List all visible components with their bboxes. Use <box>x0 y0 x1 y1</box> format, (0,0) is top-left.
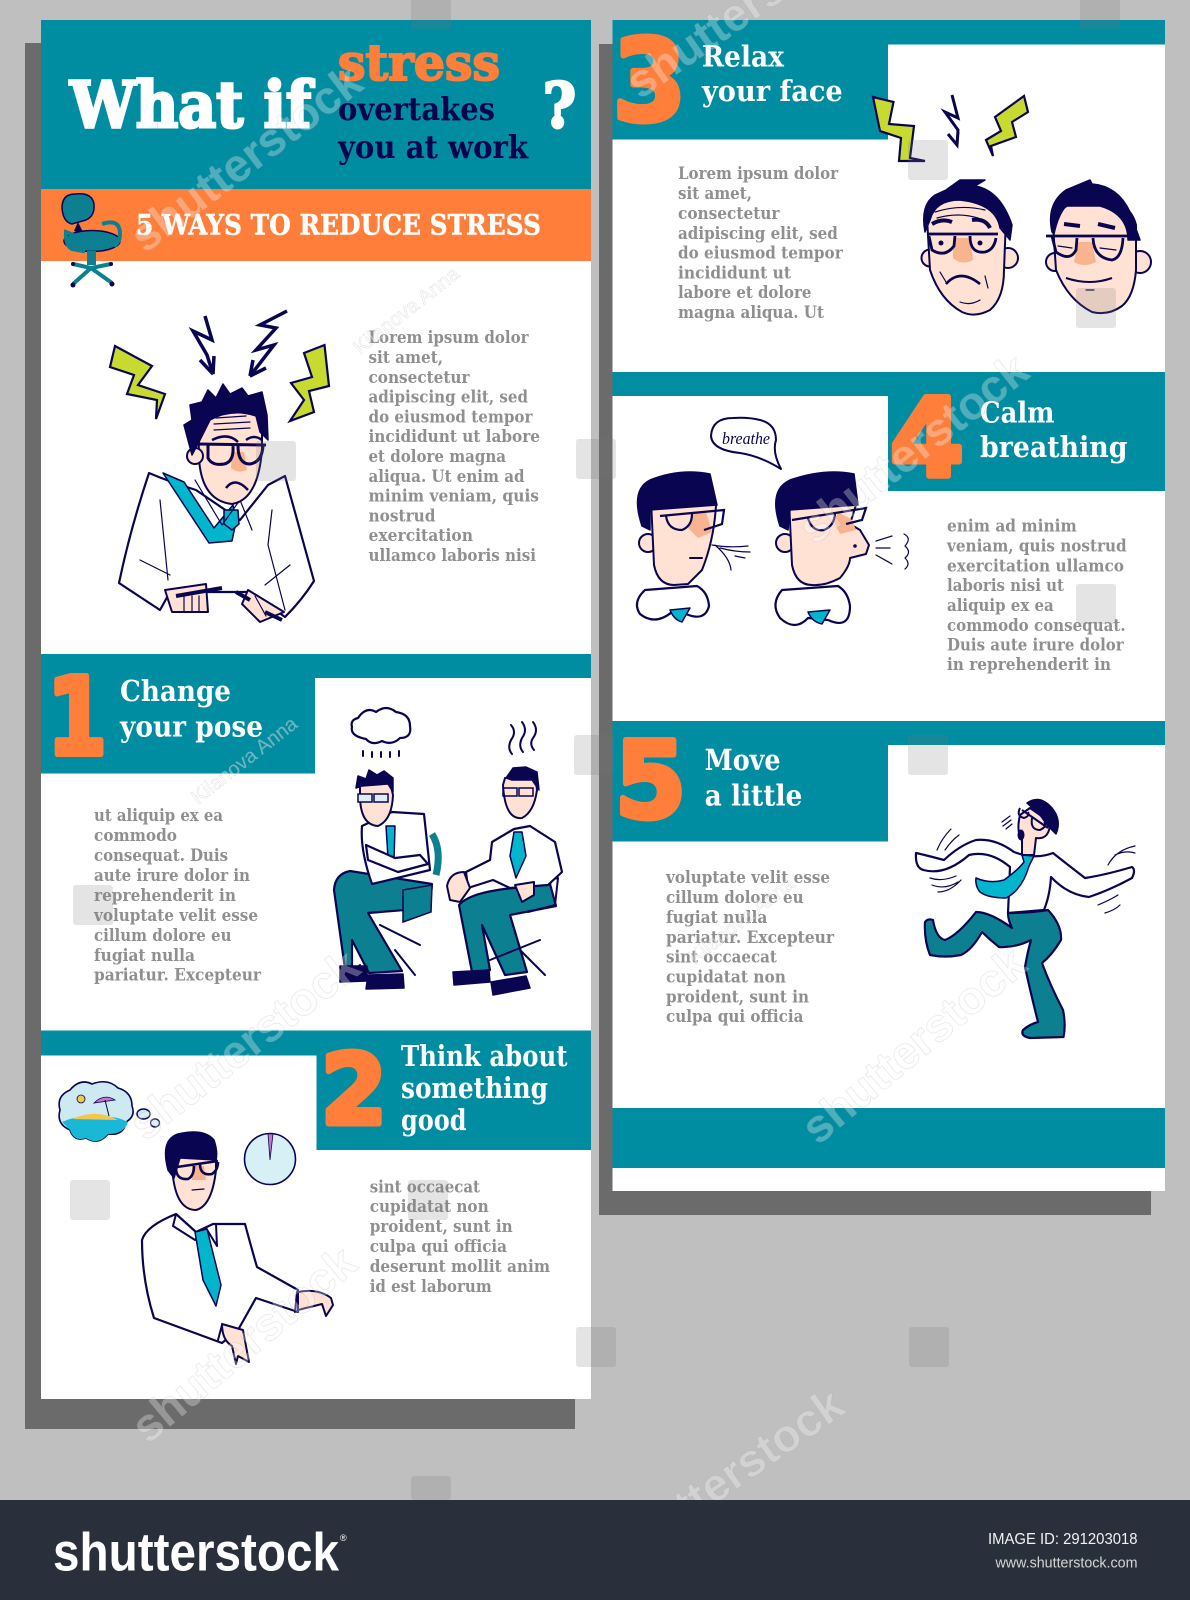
title: you at work: you at work <box>337 128 529 166</box>
text block: section 1: cillum dolore eu <box>94 926 232 946</box>
watermarks: shutterstock <box>597 1377 853 1578</box>
text block: section 4: commodo consequat. <box>947 616 1126 636</box>
text block: section 4 <box>946 517 1127 675</box>
title: question mark: ? <box>543 69 576 142</box>
text block: section 1: consequat. Duis <box>94 846 228 866</box>
text block: section 1: reprehenderit in <box>94 886 236 906</box>
text block: section 3: magna aliqua. Ut <box>678 303 824 323</box>
text block: section 4: laboris nisi ut <box>947 576 1064 596</box>
text block: intro: exercitation <box>368 526 473 546</box>
text block: section 1: pariatur. Excepteur <box>94 966 262 986</box>
website: www.shutterstock.com <box>995 1555 1138 1572</box>
text block: section 5: sint occaecat <box>666 948 777 968</box>
text block: section 1 <box>93 806 262 986</box>
text block: section 3: Lorem ipsum dolor <box>678 164 839 184</box>
section 1 header: your pose <box>119 710 263 744</box>
icon: thought cloud with beach <box>59 1082 159 1141</box>
illustration: dancing wobbly man <box>916 799 1135 1038</box>
text block: section 3: adipiscing elit, sed <box>678 224 838 244</box>
watermarks: Kilanova Anna <box>350 262 465 359</box>
text block: intro: do eiusmod tempor <box>368 408 533 428</box>
section 5 header <box>612 720 1165 842</box>
section 4 header <box>612 372 1165 502</box>
watermarks: shutterstock <box>120 54 372 262</box>
section 1 header <box>41 654 591 780</box>
section 2 header: Think about <box>401 1039 568 1073</box>
section 2 header: something <box>401 1071 548 1105</box>
illustration: breathing men <box>637 418 908 625</box>
icon: clock <box>244 1134 296 1184</box>
text block: section 4: exercitation ullamco <box>947 556 1124 576</box>
section 5 header: Move <box>705 743 781 777</box>
panel shadow: right page <box>599 44 1151 1215</box>
text block: intro <box>368 328 540 566</box>
section 2 header: good <box>401 1103 466 1137</box>
torso and arms <box>916 840 1134 913</box>
title: What if: What if <box>69 68 314 143</box>
text block: intro: et dolore magna <box>368 447 506 467</box>
text block: section 1: ut aliquip ex ea <box>94 806 223 826</box>
stressed face <box>922 180 1018 315</box>
icon: yellow lightning right <box>986 96 1028 156</box>
text block: section 3: do eiusmod tempor <box>678 244 844 264</box>
title: overtakes: overtakes <box>338 90 495 128</box>
image id: IMAGE ID: 291203018 <box>988 1531 1138 1548</box>
watermarks <box>119 0 1038 1578</box>
man inhaling <box>637 472 750 622</box>
hands <box>298 1291 333 1316</box>
text block: section 2: deserunt mollit anim <box>370 1257 550 1277</box>
section 3 header: your face <box>701 74 843 108</box>
text block: section 3: incididunt ut <box>678 264 791 284</box>
watermarks: Kilanova Anna <box>685 872 800 969</box>
number 4: 4 <box>890 377 964 502</box>
text block: section 2: id est laborum <box>370 1277 492 1297</box>
text block: intro: incididunt ut labore <box>368 427 540 447</box>
text block: section 3 <box>678 164 844 323</box>
subtitle band <box>41 189 591 261</box>
watermarks: Kilanova Anna <box>188 712 303 809</box>
section 2 header <box>41 1030 591 1150</box>
illustration: two men on chairs <box>334 708 562 995</box>
slumped man <box>334 770 438 989</box>
watermarks: shutterstock <box>791 936 1036 1154</box>
man torso <box>142 1214 298 1343</box>
footer band of right page <box>612 1108 1165 1168</box>
tie <box>195 1229 221 1306</box>
pants <box>925 910 1065 1038</box>
text block: section 2: proident, sunt in <box>370 1217 513 1237</box>
text block: section 3: sit amet, <box>678 184 752 204</box>
man body <box>119 473 314 617</box>
motion lines <box>930 816 1135 913</box>
text block: section 3: consectetur <box>678 204 780 224</box>
text block: section 5 <box>665 868 835 1027</box>
blue tie over shoulder <box>163 473 236 543</box>
footer bar <box>0 1500 1190 1600</box>
tie <box>976 855 1034 898</box>
head <box>172 1150 216 1210</box>
section 5 header: a little <box>705 779 802 813</box>
subtitle band: 5 WAYS TO REDUCE STRESS <box>136 208 541 242</box>
text block: section 1: commodo <box>94 826 177 846</box>
text block: section 5: culpa qui officia <box>666 1007 804 1027</box>
callout: speech bubble breathe <box>711 418 781 469</box>
man exhaling <box>775 472 908 625</box>
text block: intro: Lorem ipsum dolor <box>368 328 529 348</box>
title: stress: stress <box>338 33 500 92</box>
relaxed man <box>447 767 562 995</box>
text block: intro: ullamco laboris nisi <box>368 546 536 566</box>
number 2: 2 <box>321 1034 387 1146</box>
text block: section 5: proident, sunt in <box>666 988 809 1008</box>
text block: section 5: pariatur. Excepteur <box>666 928 835 948</box>
section 4 header: Calm <box>980 395 1055 429</box>
man head <box>199 405 262 504</box>
text block: section 4: Duis aute irure dolor <box>947 636 1125 656</box>
text block: section 2: cupidatat non <box>370 1197 489 1217</box>
panel shadow: left page <box>25 43 575 1429</box>
watermarks: shutterstock <box>121 1235 366 1453</box>
text block: intro: nostrud <box>368 506 436 526</box>
title banner <box>41 20 591 189</box>
text block: intro: aliqua. Ut enim ad <box>368 467 525 487</box>
text block: section 3: labore et dolore <box>678 283 812 303</box>
section 3 header <box>612 17 1165 147</box>
relaxed face <box>1046 180 1151 313</box>
text block: section 5: fugiat nulla <box>666 908 767 928</box>
icon: navy arrow bolts <box>193 311 287 376</box>
panel: left page <box>41 20 591 1399</box>
text block: section 2: culpa qui officia <box>370 1237 507 1257</box>
text block: section 4: in reprehenderit in <box>947 655 1111 675</box>
illustration: man thinking of beach <box>59 1082 333 1364</box>
icon: navy arrow bolt <box>945 95 958 145</box>
text block: section 5: cupidatat non <box>666 968 786 988</box>
text block: section 5: cillum dolore eu <box>666 888 804 908</box>
text block: intro: sit amet, <box>368 348 443 368</box>
icon: steam lines <box>509 722 536 754</box>
callout: speech bubble breathe: breathe <box>722 429 770 448</box>
illustration: stressed and relaxed faces <box>873 95 1151 315</box>
text block: section 1: voluptate velit esse <box>93 906 258 926</box>
text block: section 4: aliquip ex ea <box>947 596 1054 616</box>
text block: intro: minim veniam, quis <box>368 486 539 506</box>
icon: yellow lightning right <box>290 345 329 421</box>
illustration: stressed man snapping pencil <box>110 311 329 622</box>
text block: intro: adipiscing elit, sed <box>368 388 528 408</box>
text block: section 1: fugiat nulla <box>94 946 195 966</box>
text block: section 1: aute irure dolor in <box>94 866 250 886</box>
icon: yellow lightning left <box>110 346 165 419</box>
icon: office chair <box>62 194 120 288</box>
section 1 header: Change <box>120 674 231 708</box>
section 3 header: Relax <box>702 40 785 74</box>
text block: section 2: sint occaecat <box>370 1177 480 1197</box>
number 5: 5 <box>615 720 686 842</box>
hands and pencil <box>165 584 208 612</box>
number 1: 1 <box>47 656 107 780</box>
text block: section 2 <box>370 1177 550 1297</box>
icon: yellow lightning left <box>873 97 925 161</box>
head <box>1018 808 1050 855</box>
text block: section 5: voluptate velit esse <box>665 868 830 888</box>
watermarks: shutterstock <box>788 343 1038 554</box>
icon: rain cloud <box>352 708 410 757</box>
text block: section 4: veniam, quis nostrud <box>946 536 1127 556</box>
text block: section 4: enim ad minim <box>947 517 1077 537</box>
watermarks: shutterstock <box>119 939 369 1150</box>
number 3: 3 <box>613 17 686 147</box>
registered mark: ® <box>340 1533 347 1543</box>
text block: intro: consectetur <box>368 368 470 388</box>
panel: right page <box>612 17 1165 1191</box>
section 4 header: breathing <box>980 430 1128 464</box>
footer logo: shutterstock <box>53 1522 340 1582</box>
